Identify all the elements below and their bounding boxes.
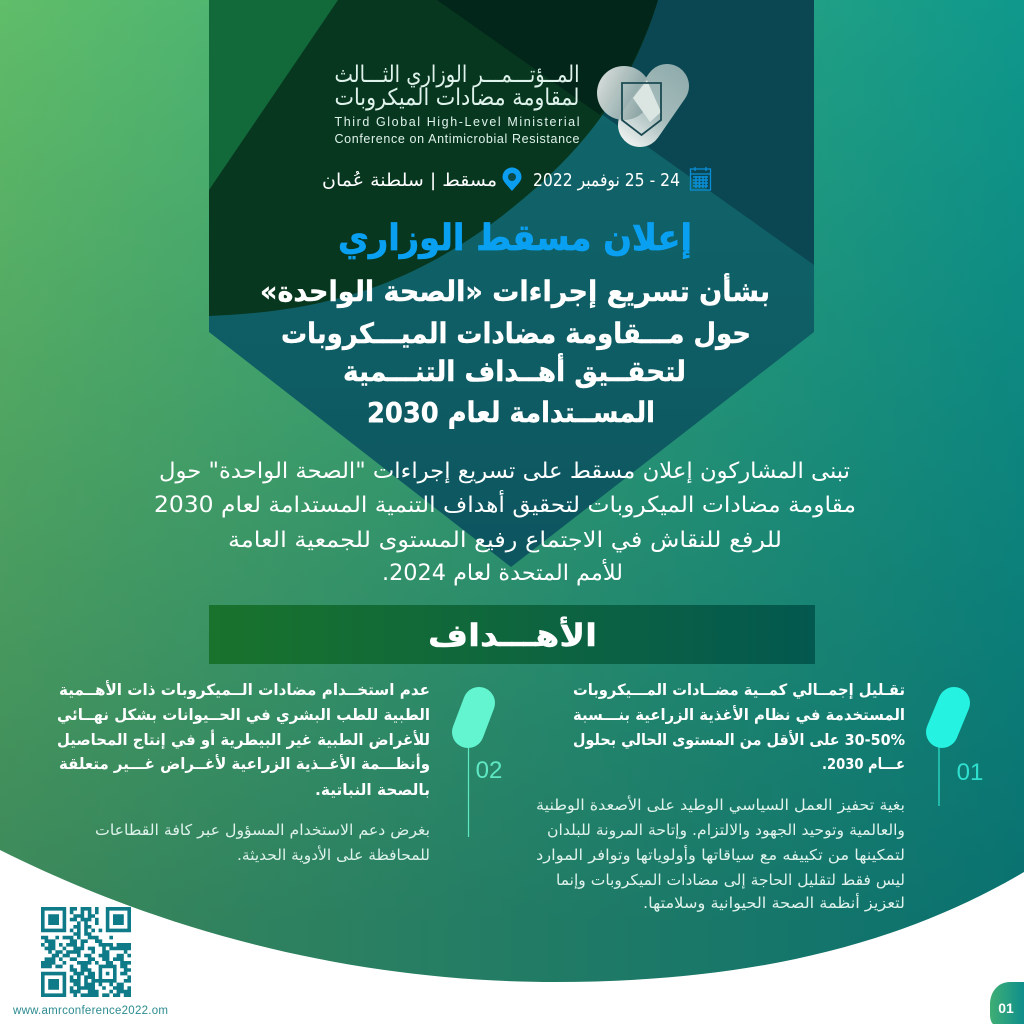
objective 02 marker [468,703,502,837]
page number tab: 01 [998,1000,1014,1016]
objectives banner [209,605,815,664]
intro paragraph [154,459,856,586]
subtitle: بشأن تسريع إجراءات «الصحة الواحدة» [260,273,770,309]
page number tab [990,982,1024,1024]
objective 01 heading: المستخدمة في نظام الأغذية الزراعية بنـــسبة [573,705,905,725]
intro paragraph: للأمم المتحدة لعام 2024. [382,559,623,586]
objective 01 heading: تقـليل إجمــالي كمــية مضــادات المـــيكروبات [573,681,905,700]
icon: location pin [502,168,522,191]
website url: www.amrconference2022.om [12,1005,168,1017]
objective 01 marker: 01 [957,759,983,786]
objective 01 heading [573,681,905,773]
objective 01 marker [939,703,983,806]
conference name: لمقاومة مضادات الميكروبات [334,85,580,111]
objective 01 description: والعالمية وتوحيد الجهود والالتزام. وإتاحة المرونة للبلدان [547,821,905,839]
objective 01 description: بغية تحفيز العمل السياسي الوطيد على الأصعدة الوطنية [536,795,905,815]
objective 01 description: لتعزيز أنظمة الصحة الحيوانية وسلامتها. [643,893,905,912]
objective 02 description: للمحافظة على الأدوية الحديثة. [237,845,430,864]
title: إعلان مسقط الوزاري [338,218,692,259]
intro paragraph: للرفع للنقاش في الاجتماع رفيع المستوى للجمعية العامة [228,528,782,553]
objective 02 description: بغرض دعم الاستخدام المسؤول عبر كافة القطاعات [95,821,430,839]
objective 02 heading: عدم استخــدام مضادات الــميكروبات ذات الأهــمية [59,680,430,699]
subtitle: لتحقــيق أهــداف التنـــمية [343,353,686,388]
objective 02 description [95,821,430,864]
QR code [41,907,131,997]
objective 02 marker: 02 [476,757,502,784]
conference name: Conference on Antimicrobial Resistance [334,132,580,146]
objective 01 description: ليس فقط لتقليل الحاجة إلى مضادات الميكروبات وإنما [556,871,905,889]
objective 01 heading: 30-50% على الأقل من المستوى الحالي بحلول [573,730,905,750]
central header panel [209,0,815,570]
objective 01 heading: عـــام 2030. [822,755,905,773]
event location: مسقط | سلطنة عُمان [322,170,497,191]
white bottom curve [0,850,1024,1024]
intro paragraph: تبنى المشاركون إعلان مسقط على تسريع إجراءات "الصحة الواحدة" حول [159,459,850,484]
conference name: المــؤتـــمـــر الوزاري الثـــالث [334,62,580,88]
objective 02 heading: بالصحة النباتية. [315,781,430,799]
objective 02 heading: وأنظـــمة الأغــذية الزراعية لأغــراض غـــير متعلقة [59,754,430,773]
subtitle [260,273,770,429]
objective 01 description: لتمكينها من تكييفه مع سياقاتها وأولوياتها وتوافر الموارد [536,845,905,864]
subtitle: المســتدامة لعام 2030 [367,396,655,429]
intro paragraph: مقاومة مضادات الميكروبات لتحقيق أهداف التنمية المستدامة لعام 2030 [154,490,856,518]
conference logo [597,66,667,135]
objective 02 heading [57,680,430,799]
objective 02 heading: للأغراض الطبية غير البيطرية أو في إنتاج المحاصيل [57,730,430,750]
objective 02 heading: الطبية للطب البشري في الحــيوانات بشكل نهــائي [57,706,430,725]
icon: calendar [690,167,710,190]
conference name: Third Global High-Level Ministerial [334,115,580,129]
objectives banner: الأهـــداف [428,616,597,654]
conference name [334,62,580,146]
subtitle: حول مـــقاومة مضادات الميـــكروبات [281,317,751,350]
event date: 24 - 25 نوفمبر 2022 [533,170,680,191]
objective 01 description [536,795,905,912]
